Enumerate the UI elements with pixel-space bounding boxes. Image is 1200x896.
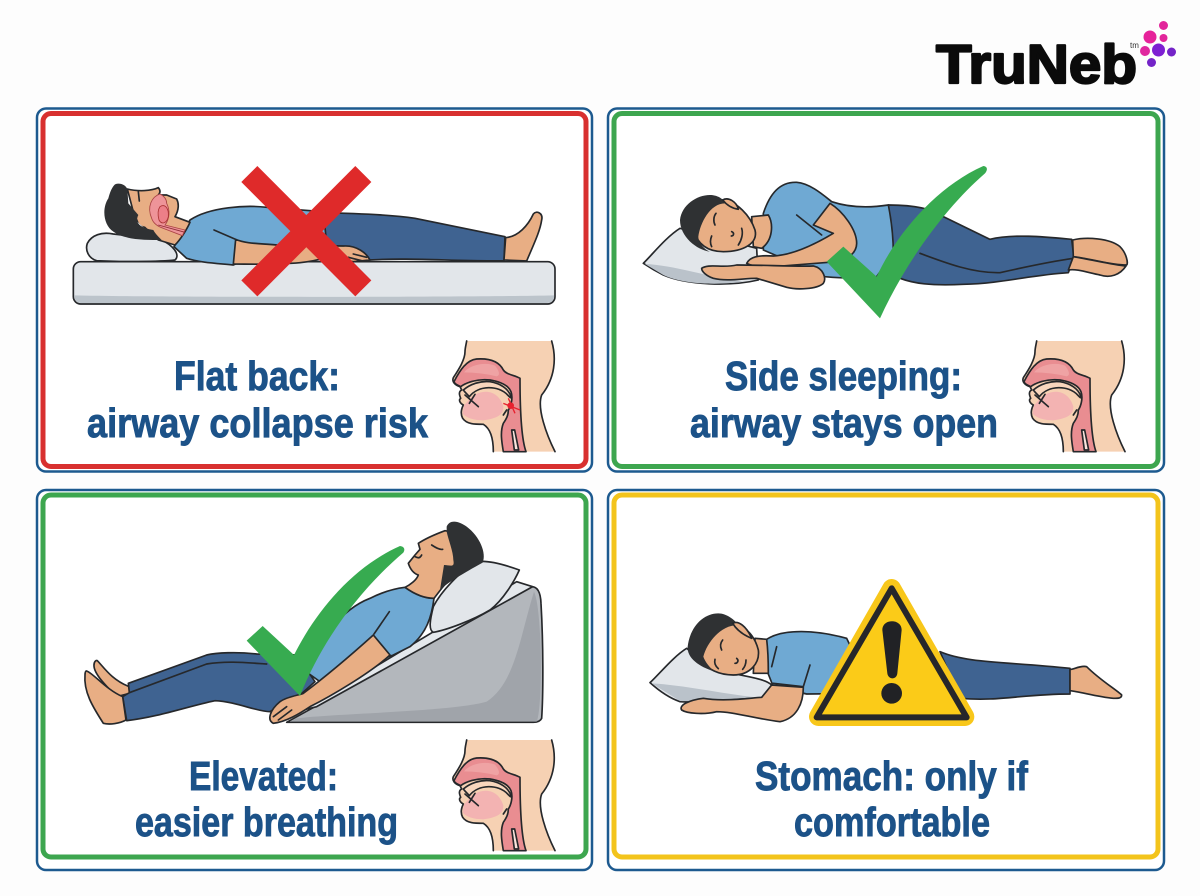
heading: airway stays open [690,400,998,446]
inset: open airway [1023,341,1125,452]
heading [690,353,998,446]
warning triangle [817,588,967,717]
heading [135,753,398,845]
panel frame [608,108,1164,472]
panel frame [37,108,592,472]
green check mark [827,166,987,318]
heading [755,753,1028,845]
heading: Stomach: only if [755,753,1028,799]
panel frame [608,490,1164,870]
heading [87,353,428,446]
trademark mark: tm [1130,41,1139,50]
illustration: man sleeping on side [643,166,1127,318]
panel: flat back [37,108,592,472]
logo: TruNeb [936,21,1176,95]
heading: Flat back: [174,353,340,399]
panel: elevated [37,490,592,870]
heading: Elevated: [189,753,338,799]
logo wordmark: TruNeb [936,33,1137,95]
heading: easier breathing [135,799,398,845]
illustration: man lying flat on mattress [73,174,555,304]
panel: side sleeping [608,108,1164,472]
illustration: man elevated on wedge [85,522,543,724]
logo dots [1140,21,1176,67]
heading: Side sleeping: [725,353,962,399]
panel frame [37,490,592,870]
heading: airway collapse risk [87,400,428,446]
green check mark [247,546,404,696]
inset: narrowed airway [453,341,555,452]
panel: stomach [608,490,1164,870]
illustration: man lying on stomach [650,588,1122,722]
inset: elevated airway [453,740,555,851]
heading: comfortable [794,799,990,845]
red X mark [249,174,363,288]
head with open airway [104,184,190,245]
